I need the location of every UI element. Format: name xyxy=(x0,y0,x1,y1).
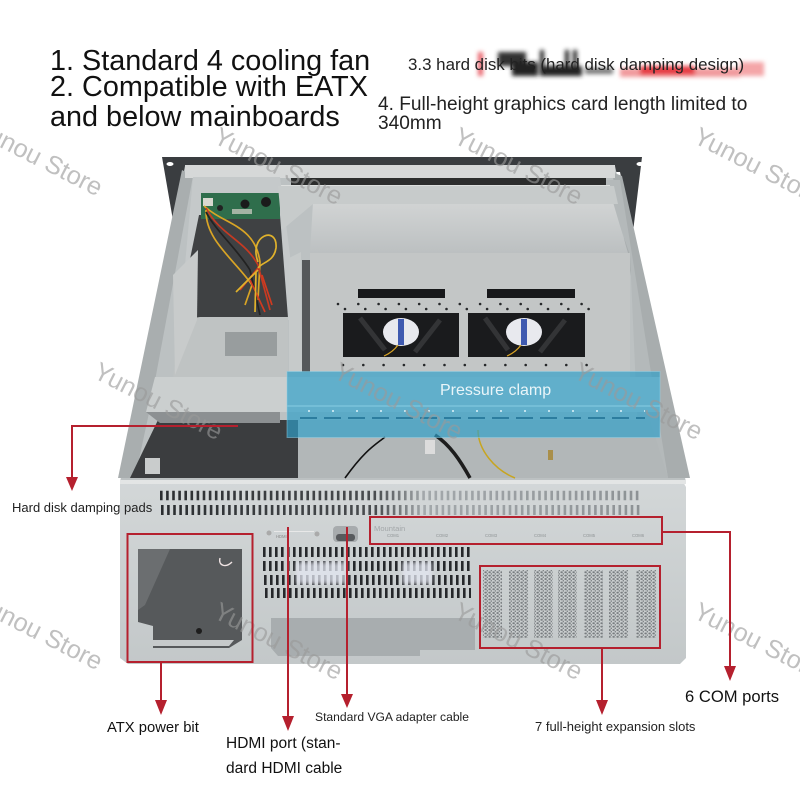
fan cage front plate xyxy=(310,253,630,378)
COM port row: COM4 xyxy=(534,533,547,538)
COM port row: COM1 xyxy=(387,533,400,538)
COM port row: Mountain xyxy=(374,524,405,533)
VGA port and HDMI cutout: HDMI xyxy=(276,534,287,539)
lower motherboard opening xyxy=(271,618,475,656)
watermarks: Yunou Store xyxy=(329,357,467,446)
upper vent rows xyxy=(160,496,640,510)
light fan glare behind vents xyxy=(296,562,432,584)
interior cables xyxy=(345,430,515,478)
floor standoffs xyxy=(145,440,553,474)
watermarks: Yunou Store xyxy=(449,122,587,211)
callout: HDMI port xyxy=(226,527,342,777)
cooling fan left xyxy=(343,313,459,357)
central vent rows xyxy=(263,552,471,593)
callout: hard disk damping pads: Hard disk damping pads xyxy=(12,500,153,515)
watermarks: Yunou Store xyxy=(89,357,227,446)
text: graphics card limit note: 340mm xyxy=(378,113,442,134)
label: pressure clamp: Pressure clamp xyxy=(440,382,551,399)
heading: cooling fan and mainboard features: 2. Compatible with EATX xyxy=(50,71,368,103)
rear rail and slot xyxy=(185,165,615,193)
blurred smudge behind hard disk note xyxy=(478,50,764,77)
fan cage top lip xyxy=(278,186,618,230)
dark cavity under crossbar xyxy=(130,420,300,478)
interior floor xyxy=(298,420,668,478)
watermarks: Yunou Store xyxy=(209,122,347,211)
callout: ATX power bit: ATX power bit xyxy=(107,720,199,736)
COM port row xyxy=(374,524,645,538)
bundled power wires xyxy=(204,206,276,315)
crossbar rail xyxy=(146,377,660,423)
callout: COM ports xyxy=(370,517,779,706)
watermarks: Yunou Store xyxy=(449,597,587,686)
heading: cooling fan and mainboard features: and below mainboards xyxy=(50,101,340,133)
chassis photo illustration xyxy=(118,157,690,664)
VGA port and HDMI cutout xyxy=(266,526,358,542)
callout: expansion slots: 7 full-height expansion slots xyxy=(535,719,696,734)
text: graphics card limit note: 4. Full-height graphics card length limited to xyxy=(378,94,747,115)
callout: expansion slots xyxy=(480,566,696,734)
side walls xyxy=(118,170,690,478)
COM port row: COM3 xyxy=(485,533,498,538)
watermarks xyxy=(0,113,800,686)
fan cage upper panel xyxy=(310,192,628,253)
fan cage vent slots xyxy=(358,289,575,298)
heading: cooling fan and mainboard features: 1. Standard 4 cooling fan xyxy=(50,45,370,77)
callout: VGA adapter cable: Standard VGA adapter cable xyxy=(315,710,469,724)
fan cage mounting holes xyxy=(338,304,600,365)
callout: COM ports: 6 COM ports xyxy=(685,687,779,706)
text: graphics card limit note xyxy=(378,94,747,134)
left bay: dark cavity xyxy=(178,215,288,318)
power distribution board xyxy=(201,193,280,219)
callout: ATX power bit xyxy=(107,534,252,736)
rear flange with ears xyxy=(162,157,644,232)
callout: hard disk damping pads xyxy=(12,426,238,515)
power supply cutout xyxy=(138,549,242,648)
watermarks: Yunou Store xyxy=(569,357,707,446)
expansion slot covers xyxy=(483,570,656,638)
front panel xyxy=(120,480,686,664)
callout: VGA adapter cable xyxy=(315,527,469,724)
text: hard disk damping note: 3.3 hard disk bits (hard disk damping design) xyxy=(408,55,744,74)
callout: HDMI port: HDMI port (stan- xyxy=(226,735,341,752)
heading: cooling fan and mainboard features xyxy=(50,45,370,133)
COM port row: COM2 xyxy=(436,533,449,538)
cooling fan right xyxy=(468,313,585,357)
chassis interior base xyxy=(120,166,686,482)
pressure clamp highlight xyxy=(287,372,660,438)
callout: HDMI port: dard HDMI cable xyxy=(226,760,342,777)
drive bracket xyxy=(173,250,312,378)
watermarks: Yunou Store xyxy=(209,597,347,686)
COM port row: COM6 xyxy=(632,533,645,538)
COM port row: COM5 xyxy=(583,533,596,538)
left bay: back plate xyxy=(180,177,290,320)
